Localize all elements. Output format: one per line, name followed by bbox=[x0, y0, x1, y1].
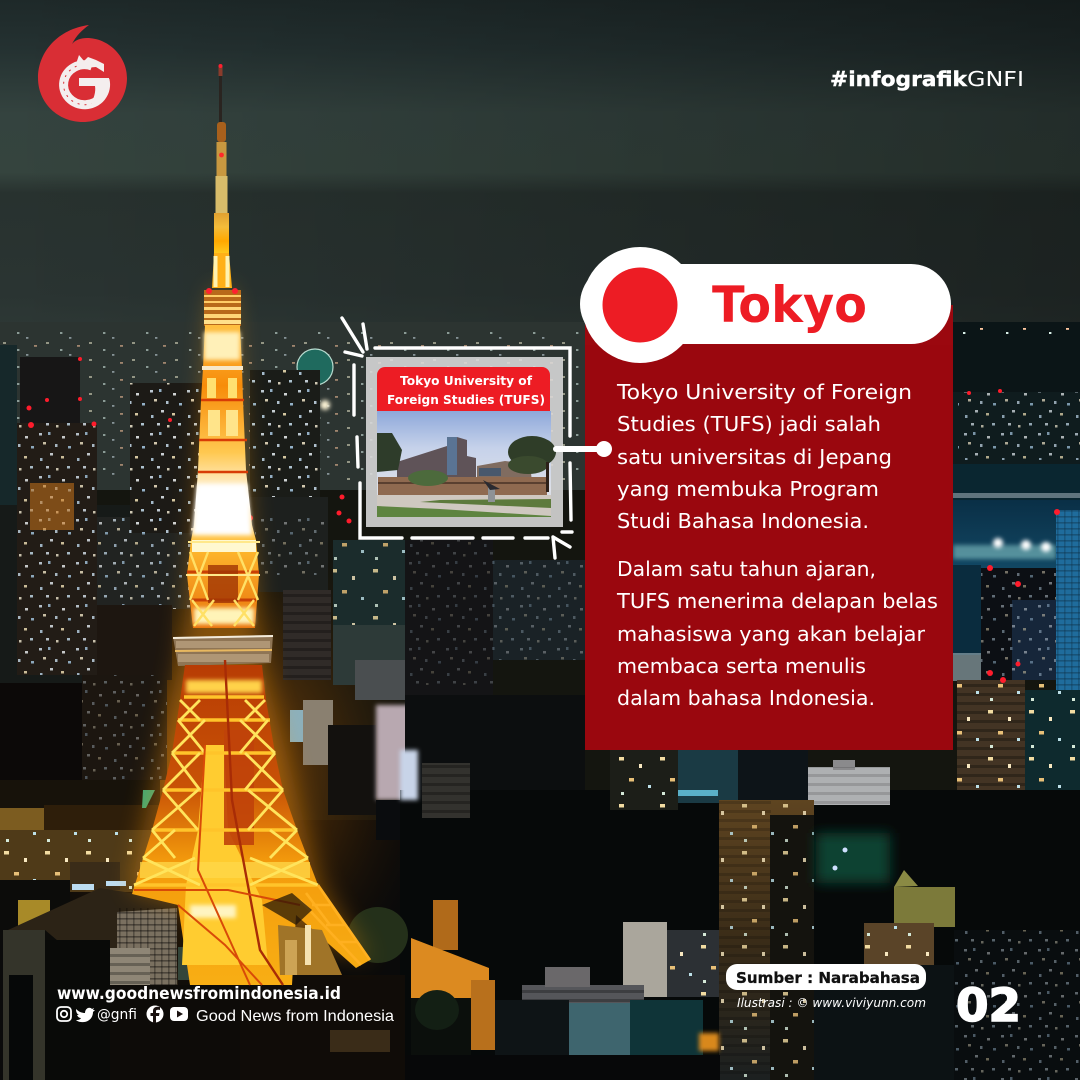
Tokyo heading pill bbox=[580, 247, 951, 363]
body paragraph 1 bbox=[616, 380, 912, 533]
connector from card to text panel bbox=[553, 441, 612, 457]
observation cap bbox=[204, 288, 241, 326]
body paragraph 2: Dalam satu tahun ajaran, bbox=[617, 557, 876, 581]
red aircraft warning lights bbox=[26, 357, 1060, 683]
hand-drawn scribble frame bbox=[342, 318, 572, 558]
lattice bracing bbox=[134, 697, 318, 885]
body paragraph 1: Studies (TUFS) jadi salah bbox=[617, 412, 881, 436]
red swirl badge bbox=[38, 25, 127, 122]
icon: youtube bbox=[170, 1007, 188, 1021]
GNFI logo bbox=[38, 25, 127, 122]
heading: Tokyo: Tokyo bbox=[712, 276, 867, 334]
source pill: Sumber : Narabahasa bbox=[736, 969, 920, 987]
hashtag: GNFI bbox=[967, 67, 1024, 91]
body paragraph 1: Studi Bahasa Indonesia. bbox=[617, 509, 869, 533]
right leg lattice bbox=[300, 885, 370, 965]
hashtag bbox=[830, 67, 1024, 91]
illustration credit: Ilustrasi : © www.viviyunn.com bbox=[737, 996, 926, 1010]
body paragraph 1: yang membuka Program bbox=[617, 477, 879, 501]
body paragraph 1: Tokyo University of Foreign bbox=[616, 380, 912, 404]
upper tower section bbox=[186, 325, 260, 628]
icon: twitter bbox=[76, 1008, 95, 1022]
hashtag: #infografik bbox=[830, 67, 968, 91]
skyline buildings left of and behind the tower bbox=[0, 345, 585, 840]
website url: www.goodnewsfromindonesia.id bbox=[57, 984, 341, 1004]
source pill bbox=[726, 964, 926, 990]
red text panel bbox=[585, 305, 953, 750]
footer website and social media bbox=[57, 984, 394, 1025]
icon: instagram bbox=[57, 1007, 71, 1021]
body paragraph 2: mahasiswa yang akan belajar bbox=[617, 622, 926, 646]
campus photo bbox=[377, 411, 556, 517]
tower glow bbox=[130, 290, 370, 960]
body paragraph 2 bbox=[616, 557, 938, 710]
university photo card bbox=[366, 357, 563, 527]
icon: facebook bbox=[146, 1006, 164, 1023]
bay and buildings on the far right bbox=[953, 392, 1080, 930]
main observation deck bbox=[173, 635, 273, 666]
card title banner: Foreign Studies (TUFS) bbox=[387, 393, 545, 407]
icon: Japan flag red circle bbox=[602, 268, 678, 342]
horizon haze and distant city lights bbox=[0, 322, 1080, 820]
rooftop billboard sign bbox=[297, 349, 333, 385]
Tokyo Tower bbox=[130, 64, 370, 985]
body paragraph 2: TUFS menerima delapan belas bbox=[616, 589, 938, 613]
night sky with clouds bbox=[0, 0, 1080, 345]
lower lattice section bbox=[132, 660, 370, 985]
lower left buildings bbox=[0, 808, 405, 1080]
white eagle G emblem bbox=[64, 55, 109, 106]
card title banner bbox=[377, 367, 550, 411]
page number: 02 bbox=[956, 979, 1021, 1032]
card title banner: Tokyo University of bbox=[400, 374, 533, 388]
antenna and spire bbox=[212, 64, 232, 288]
body paragraph 2: membaca serta menulis bbox=[617, 654, 866, 678]
body paragraph 1: satu universitas di Jepang bbox=[617, 445, 892, 469]
lower city blocks bbox=[348, 750, 1080, 1080]
facebook and youtube name: Good News from Indonesia bbox=[196, 1008, 394, 1025]
base buildings under the arch bbox=[262, 893, 312, 925]
body paragraph 2: dalam bahasa Indonesia. bbox=[617, 686, 875, 710]
twitter handle: @gnfi bbox=[97, 1007, 137, 1023]
bright inner core bbox=[182, 745, 268, 965]
glow around the tower bbox=[5, 520, 435, 1020]
